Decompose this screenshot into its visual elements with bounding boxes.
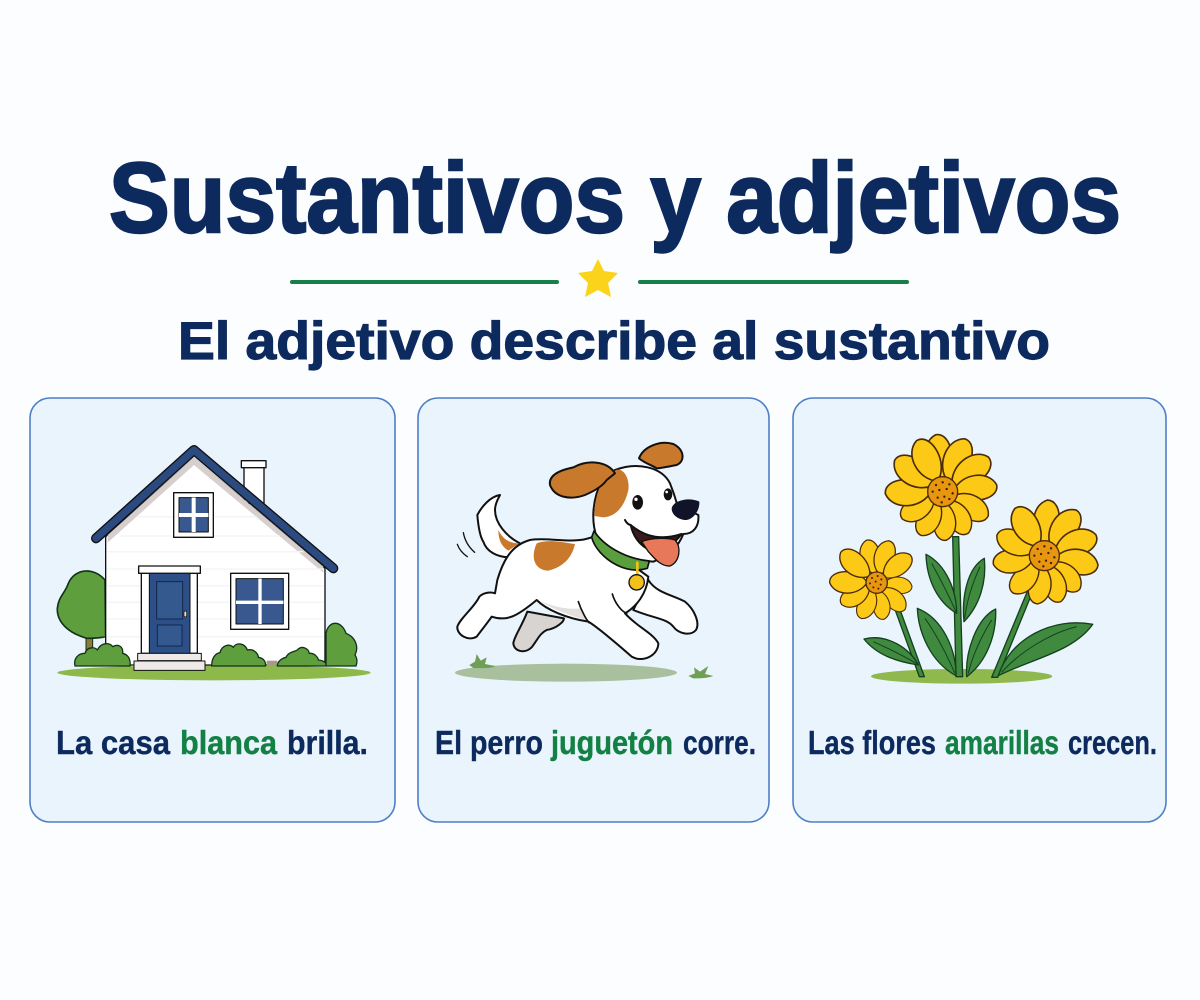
sentence: el perro jugueton corre: juguetón (550, 724, 673, 761)
icon: flowers (829, 433, 1101, 684)
subtitle: El adjetivo describe al sustantivo (178, 312, 1050, 371)
icon: dog (455, 443, 713, 682)
sentence: la casa blanca brilla (56, 724, 368, 761)
sentence: la casa blanca brilla: brilla. (287, 724, 368, 761)
sentence: el perro jugueton corre: corre. (683, 724, 756, 761)
title: Sustantivos y adjetivos (109, 142, 1121, 253)
sentence: las flores amarillas crecen: crecen. (1068, 724, 1157, 761)
icon: house (57, 450, 371, 680)
sentence: las flores amarillas crecen (808, 724, 1157, 761)
sentence: las flores amarillas crecen: Las flores (808, 724, 936, 761)
panel: la casa blanca (30, 398, 395, 822)
sentence: las flores amarillas crecen: amarillas (945, 724, 1059, 761)
sentence: el perro jugueton corre: El perro (435, 724, 543, 761)
sentence: la casa blanca brilla: blanca (180, 724, 278, 761)
panel: el perro jugueton (418, 398, 769, 822)
divider with star (290, 259, 909, 297)
panel: las flores amarillas (793, 398, 1166, 822)
sentence: el perro jugueton corre (435, 724, 756, 761)
sentence: la casa blanca brilla: La casa (56, 724, 171, 761)
